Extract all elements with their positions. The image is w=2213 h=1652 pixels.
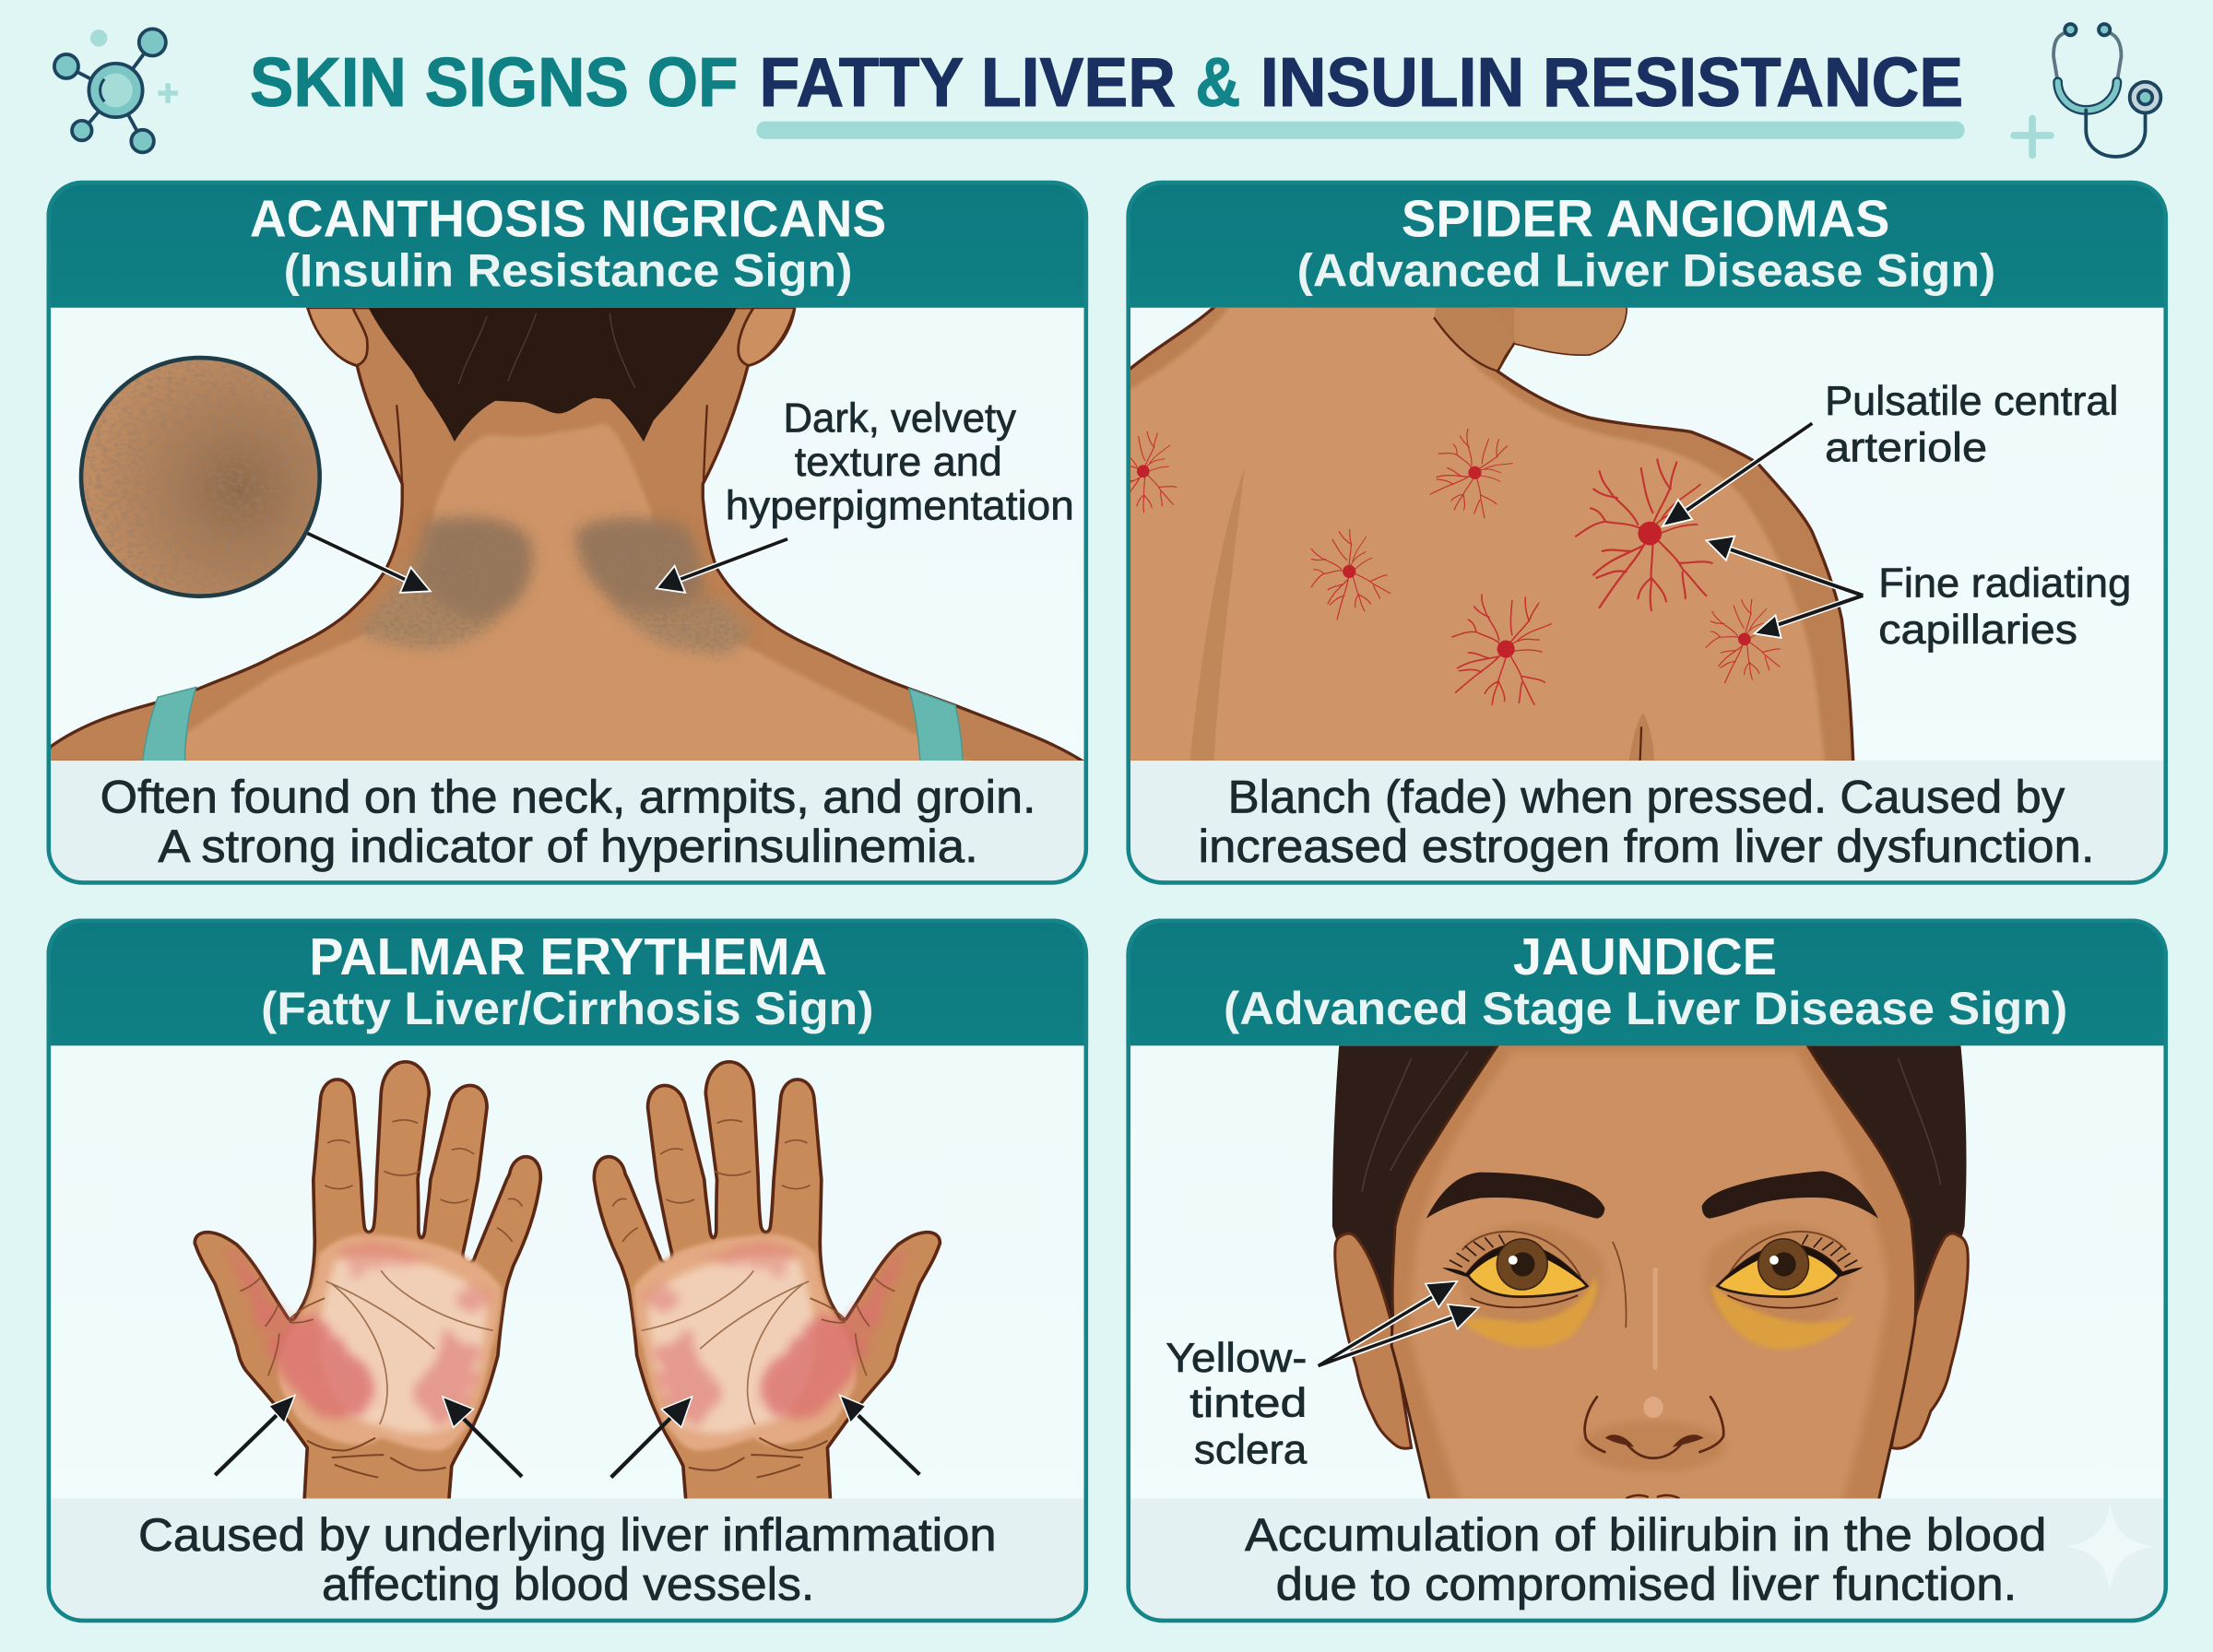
panel border — [49, 921, 1086, 1621]
left ear — [1335, 1233, 1412, 1448]
title: INSULIN RESISTANCE — [1260, 43, 1963, 121]
header — [1126, 918, 2166, 1045]
arrow: label to patch — [657, 539, 787, 593]
caption text: affecting blood vessels. — [322, 1558, 814, 1611]
forehead and cheek light — [1410, 1051, 1888, 1502]
sparkle — [2066, 1502, 2154, 1592]
right eye — [1717, 1232, 1863, 1308]
panel: palmar erythema — [47, 918, 1088, 1621]
right hyperpigmented patch — [575, 519, 750, 655]
heading: (Advanced Stage Liver Disease Sign) — [1224, 982, 2067, 1034]
title: FATTY LIVER — [759, 43, 1176, 121]
caption text: increased estrogen from liver dysfunction. — [1198, 820, 2094, 872]
heading: ACANTHOSIS NIGRICANS — [250, 190, 886, 248]
palm creases — [325, 1270, 493, 1424]
palm mid tone — [278, 1234, 501, 1450]
caption bar — [51, 761, 1084, 880]
caption text: A strong indicator of hyperinsulinemia. — [158, 820, 978, 872]
label: pulsatile central arteriole: arteriole — [1825, 426, 1987, 471]
spider: far left — [1130, 431, 1177, 513]
neck folds — [396, 405, 707, 484]
caption text — [138, 1508, 997, 1611]
title — [250, 43, 1963, 121]
label: dark velvety texture — [726, 395, 1074, 528]
heading: SPIDER ANGIOMAS — [1402, 190, 1889, 248]
eye sockets — [1456, 1224, 1852, 1333]
header — [1126, 181, 2166, 308]
illustration: back and shoulder — [1104, 305, 1853, 762]
caption text: Blanch (fade) when pressed. Caused by — [1228, 771, 2065, 823]
nose — [1580, 1242, 1726, 1471]
wrist creases — [307, 1438, 446, 1478]
spine fold — [1189, 467, 1245, 762]
skin zoom circle — [81, 358, 320, 596]
title: & — [1195, 43, 1240, 121]
caption text: Caused by underlying liver inflammation — [138, 1508, 997, 1561]
panel border — [49, 183, 1086, 882]
label: yellow-tinted sclera: Yellow- — [1166, 1336, 1307, 1381]
left eye — [1442, 1232, 1587, 1307]
heading: JAUNDICE — [1513, 928, 1777, 986]
light back area — [1122, 305, 1825, 762]
lower fold — [1628, 713, 1654, 762]
heading — [1224, 928, 2067, 1034]
hair — [368, 308, 737, 442]
hair — [1332, 1042, 1967, 1333]
right eyebrow — [1702, 1171, 1878, 1219]
left hand — [195, 1062, 540, 1502]
label: pulsatile central arteriole: Pulsatile central — [1825, 379, 2118, 424]
title: SKIN SIGNS OF — [250, 43, 739, 121]
heading: PALMAR ERYTHEMA — [309, 928, 827, 986]
pale palm center — [319, 1256, 487, 1434]
spider: large — [1576, 459, 1712, 610]
arrows: palm sites — [215, 1395, 919, 1478]
label: yellow-tinted sclera: tinted — [1189, 1381, 1307, 1426]
heading: (Insulin Resistance Sign) — [284, 244, 852, 297]
face shape — [1391, 1042, 1916, 1502]
arrow: circle to patch — [308, 534, 431, 593]
finger creases — [240, 1120, 522, 1375]
under-eye yellow right — [1710, 1284, 1856, 1349]
panel: jaundice — [1126, 918, 2166, 1621]
caption text: due to compromised liver function. — [1276, 1558, 2017, 1611]
spider: upper — [1429, 428, 1513, 518]
neck and chin folds — [1434, 305, 1514, 372]
caption bar — [1130, 761, 2163, 880]
spider: lower — [1451, 594, 1553, 706]
caption text — [101, 771, 1035, 872]
label: pulsatile central arteriole — [1825, 379, 2118, 471]
arrow: to central arteriole — [1663, 423, 1812, 526]
right strap — [909, 689, 963, 762]
hair strands — [1362, 1051, 1941, 1192]
erythema patches — [224, 1239, 494, 1430]
caption text — [1198, 771, 2094, 872]
right hand — [594, 1062, 940, 1502]
hair strands — [458, 313, 635, 388]
caption text — [1245, 1508, 2046, 1611]
left hyperpigmented patch — [357, 518, 531, 648]
header — [47, 918, 1088, 1045]
label: dark velvety texture: Dark, velvety — [783, 395, 1017, 441]
left eyebrow — [1426, 1173, 1604, 1219]
arrows: to sclera — [1319, 1281, 1479, 1366]
label: fine radiating capillaries: capillaries — [1878, 608, 2077, 653]
illustration: face — [1332, 1042, 1968, 1502]
label: fine radiating capillaries: Fine radiating — [1878, 560, 2131, 606]
title underline — [756, 122, 1965, 139]
panel border — [1129, 921, 2166, 1621]
label: yellow-tinted sclera: sclera — [1194, 1427, 1308, 1472]
caption bar — [51, 1499, 1084, 1619]
heading — [250, 190, 886, 297]
arrows: to capillaries — [1707, 537, 1863, 638]
heading: (Fatty Liver/Cirrhosis Sign) — [261, 982, 873, 1034]
icon: molecule — [54, 29, 178, 152]
spider: left — [1311, 529, 1391, 620]
label: dark velvety texture: texture and — [795, 440, 1002, 485]
illustration: palms — [195, 1062, 940, 1502]
lips hint — [1626, 1495, 1679, 1499]
illustration: back of neck — [42, 308, 1084, 765]
heading — [261, 928, 873, 1034]
label: fine radiating capillaries — [1878, 560, 2131, 653]
caption text: Often found on the neck, armpits, and groin. — [101, 771, 1035, 823]
left strap — [143, 687, 196, 762]
ears — [308, 308, 795, 365]
caption text: Accumulation of bilirubin in the blood — [1245, 1508, 2046, 1561]
heading — [1297, 190, 1995, 297]
panel: acanthosis nigricans — [42, 181, 1088, 882]
panel border — [1129, 183, 2166, 882]
label: dark velvety texture: hyperpigmentation — [726, 483, 1074, 528]
right ear — [1891, 1233, 1968, 1448]
label: yellow-tinted sclera — [1166, 1336, 1308, 1472]
caption bar — [1130, 1499, 2163, 1619]
icon: stethoscope — [2014, 24, 2160, 157]
header — [47, 181, 1088, 308]
light neck and back area — [141, 423, 974, 765]
under-eye yellow left — [1463, 1277, 1597, 1347]
heading: (Advanced Liver Disease Sign) — [1297, 244, 1995, 297]
spider: right — [1705, 599, 1781, 684]
panel: spider angiomas — [1104, 181, 2166, 882]
